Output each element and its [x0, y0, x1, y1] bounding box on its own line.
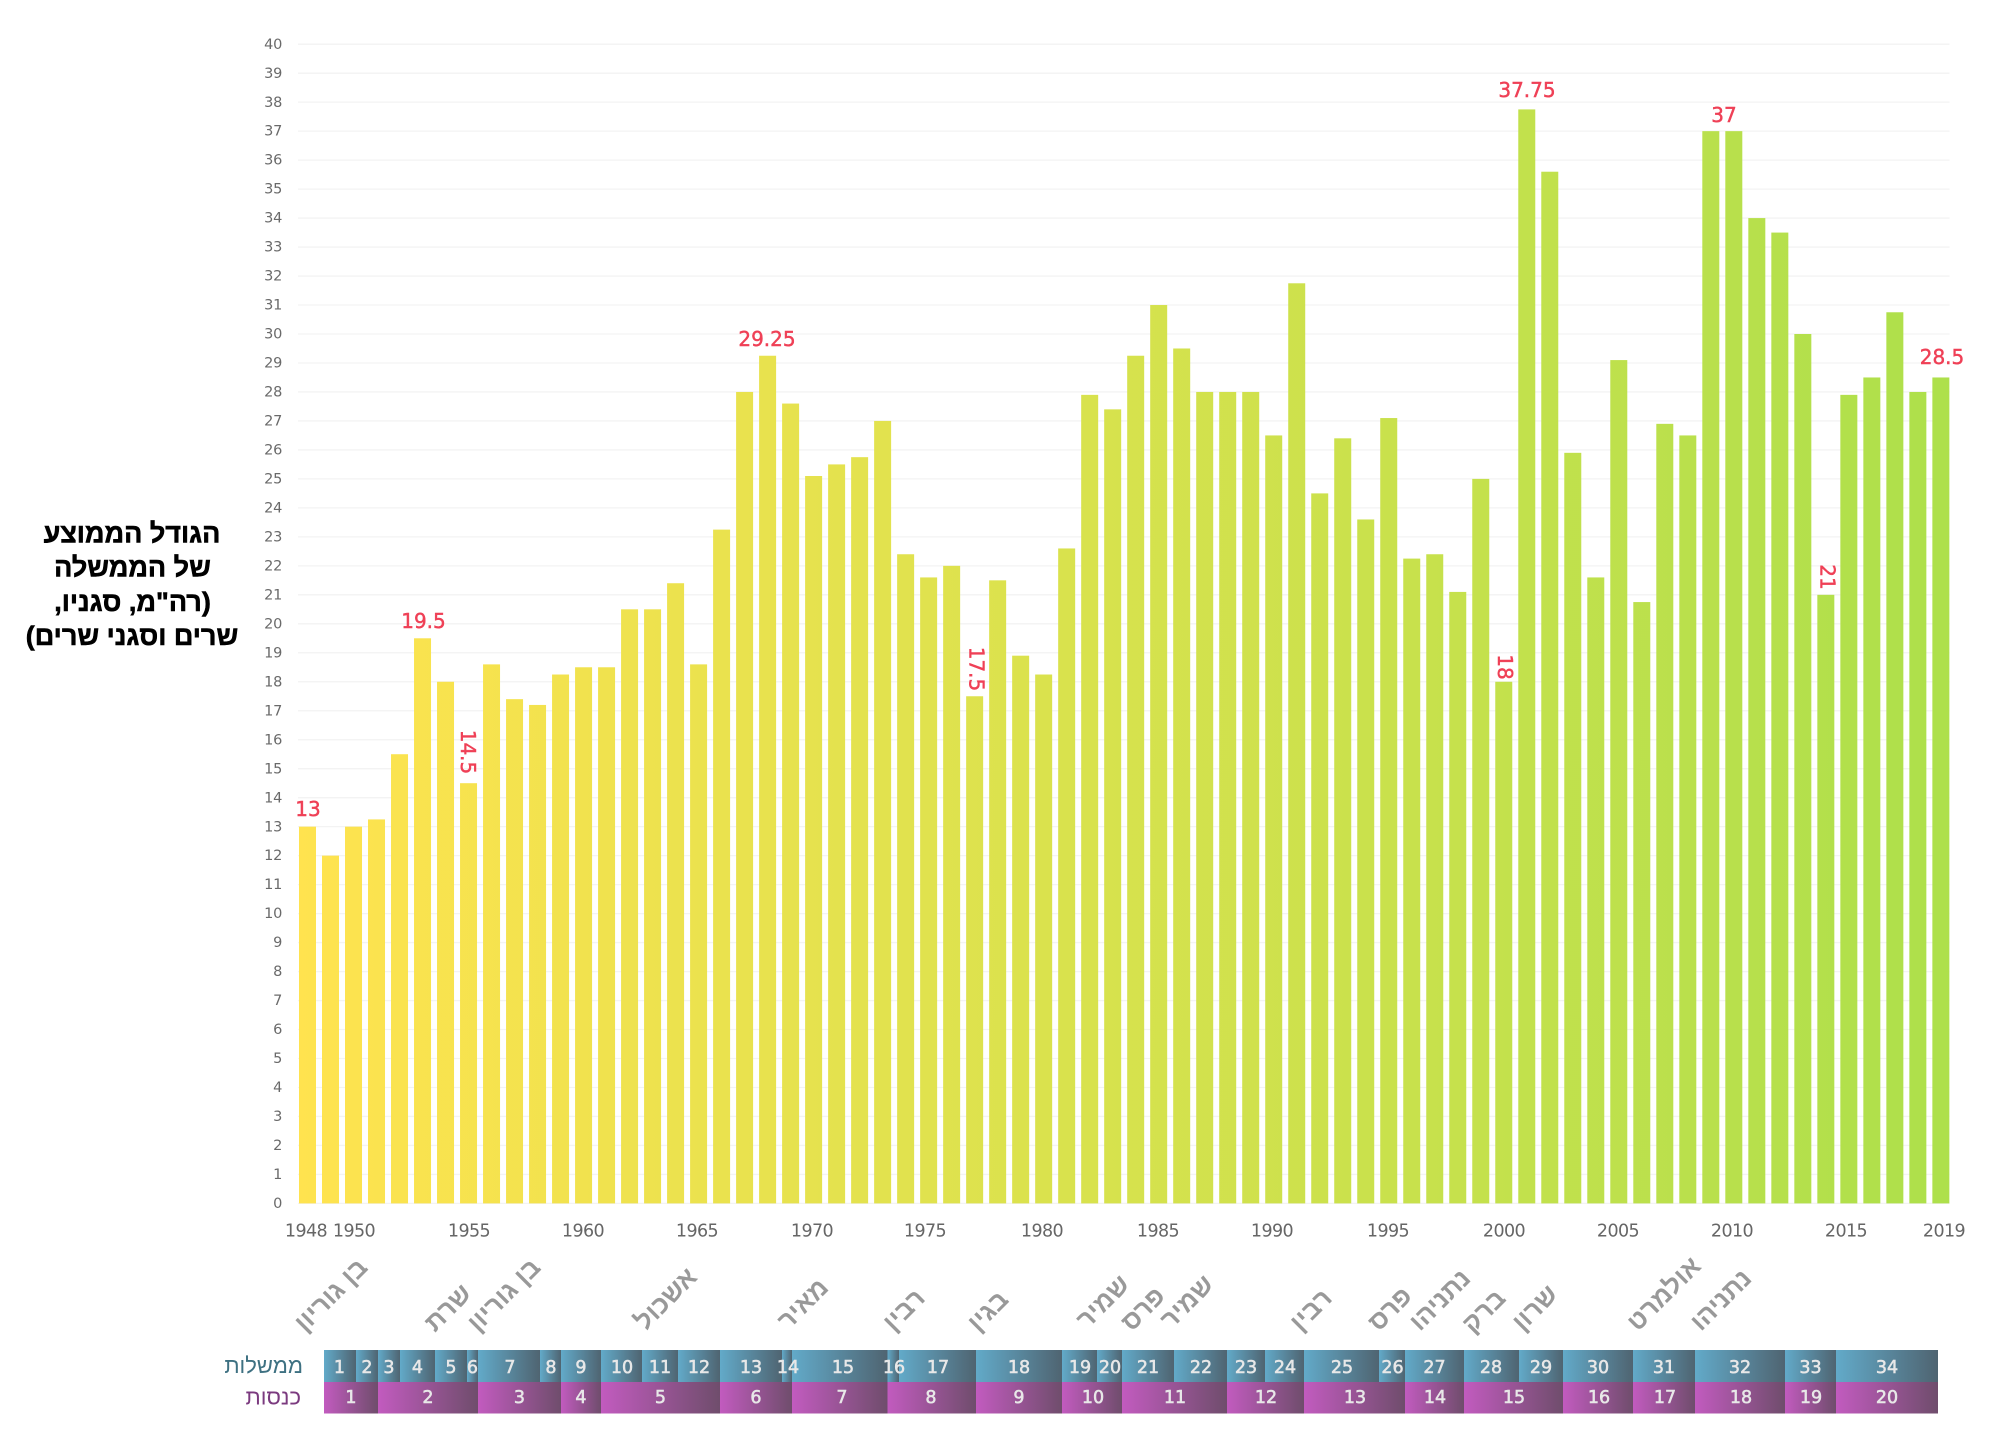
y axis labels: 39 — [264, 66, 282, 82]
prime minister names — [288, 1250, 1757, 1338]
value callouts: 28.5 — [1920, 345, 1964, 369]
governments row: 12 — [688, 1358, 710, 1378]
knessets row: 1 — [345, 1388, 357, 1408]
governments row: 18 — [1008, 1358, 1030, 1378]
governments row: 2 — [361, 1358, 373, 1378]
governments row: 22 — [1190, 1358, 1212, 1378]
governments row: 11 — [649, 1358, 671, 1378]
knessets row: 9 — [1013, 1388, 1025, 1408]
bar chart — [299, 109, 1949, 1203]
governments row: 26 — [1381, 1358, 1404, 1378]
title: של הממשלה — [54, 552, 211, 582]
governments row: 19 — [1069, 1358, 1091, 1378]
knessets row: 7 — [836, 1388, 848, 1408]
knessets row: 11 — [1164, 1388, 1186, 1408]
prime minister names: רבין — [1284, 1283, 1338, 1337]
value callouts — [295, 78, 1964, 821]
knessets row: 10 — [1082, 1388, 1104, 1408]
x axis years: 2019 — [1923, 1222, 1965, 1242]
governments row: 34 — [1876, 1358, 1898, 1378]
knessets row: 3 — [514, 1388, 525, 1408]
governments row: 33 — [1799, 1358, 1822, 1378]
prime minister names: פרס — [1362, 1281, 1418, 1337]
y axis labels: 3 — [273, 1109, 282, 1125]
y axis labels: 1 — [273, 1167, 282, 1183]
governments row: 21 — [1137, 1358, 1159, 1378]
governments row: 32 — [1729, 1358, 1751, 1378]
y axis labels: 27 — [264, 413, 282, 429]
knessets row: 17 — [1654, 1388, 1676, 1408]
prime minister names: רבין — [877, 1283, 931, 1337]
governments row: 6 — [467, 1358, 478, 1378]
x axis years: 1995 — [1367, 1222, 1409, 1242]
prime minister names: אולמרט — [1621, 1250, 1707, 1337]
y axis labels — [264, 37, 282, 1212]
knessets row: 6 — [750, 1388, 762, 1408]
y axis labels: 29 — [264, 356, 282, 372]
knessets row: 15 — [1503, 1388, 1525, 1408]
knessets row: 18 — [1730, 1388, 1752, 1408]
y axis labels: 14 — [264, 790, 282, 806]
y axis labels: 35 — [264, 182, 282, 198]
y axis labels: 4 — [273, 1080, 282, 1096]
y axis labels: 31 — [264, 298, 282, 314]
y axis labels: 24 — [264, 500, 282, 516]
y axis labels: 2 — [273, 1138, 282, 1154]
governments row: 23 — [1235, 1358, 1257, 1378]
y axis labels: 9 — [273, 935, 282, 951]
x axis years: 2000 — [1483, 1222, 1525, 1242]
x axis years: 1985 — [1137, 1222, 1179, 1242]
title: הגודל הממוצע — [44, 518, 220, 548]
y axis labels: 21 — [264, 587, 282, 603]
knessets row: 19 — [1800, 1388, 1822, 1408]
x axis years: 2005 — [1597, 1222, 1639, 1242]
prime minister names: נתניהו — [1684, 1263, 1757, 1336]
y axis labels: 22 — [264, 558, 282, 574]
y axis labels: 25 — [264, 471, 282, 487]
y axis labels: 37 — [264, 124, 282, 140]
y axis labels: 18 — [264, 674, 282, 690]
y axis labels: 5 — [273, 1051, 282, 1067]
y axis labels: 20 — [264, 616, 282, 632]
governments row: 29 — [1530, 1358, 1552, 1378]
governments row: 8 — [545, 1358, 557, 1378]
knessets row: 2 — [422, 1388, 434, 1408]
value callouts: 13 — [295, 797, 321, 821]
value callouts: 14.5 — [456, 730, 480, 774]
prime minister names: ברק — [1456, 1283, 1511, 1338]
governments row: 25 — [1331, 1358, 1353, 1378]
knessets row: 8 — [925, 1388, 937, 1408]
governments row: 27 — [1423, 1358, 1446, 1378]
title: (רה"מ, סגניו, — [54, 587, 211, 617]
governments row: 5 — [445, 1358, 457, 1378]
governments row — [324, 1350, 1938, 1382]
governments row: 17 — [927, 1358, 949, 1378]
x axis years: 1960 — [562, 1222, 604, 1242]
y axis labels: 40 — [264, 37, 282, 53]
knessets row: 5 — [655, 1388, 666, 1408]
y axis labels: 34 — [264, 211, 282, 227]
prime minister names: שמיר — [1154, 1269, 1219, 1334]
y axis labels: 36 — [264, 153, 282, 169]
governments row: 31 — [1653, 1358, 1675, 1378]
x axis years — [285, 1222, 1965, 1242]
governments row: 1 — [334, 1358, 345, 1378]
knessets row: 4 — [575, 1388, 587, 1408]
y axis labels: 33 — [264, 240, 282, 256]
x axis years: 1948 — [285, 1222, 327, 1242]
y axis labels: 10 — [264, 906, 282, 922]
row label: governments: ממשלות — [224, 1353, 303, 1378]
governments row: 24 — [1274, 1358, 1296, 1378]
prime minister names: שמיר — [1070, 1269, 1135, 1334]
x axis years: 1975 — [904, 1222, 946, 1242]
value callouts: 29.25 — [738, 327, 796, 351]
y axis labels: 7 — [273, 993, 282, 1009]
governments row: 4 — [412, 1358, 423, 1378]
x axis years: 1970 — [791, 1222, 833, 1242]
y axis labels: 38 — [264, 95, 282, 111]
x axis years: 2015 — [1825, 1222, 1867, 1242]
value callouts: 17.5 — [964, 647, 988, 691]
governments row: 3 — [383, 1358, 395, 1378]
x axis years: 1950 — [333, 1222, 375, 1242]
row label: knessets: כנסות — [246, 1384, 301, 1410]
y axis labels: 28 — [264, 385, 282, 401]
x axis years: 1965 — [676, 1222, 718, 1242]
y axis labels: 23 — [264, 530, 282, 546]
governments row: 20 — [1099, 1358, 1121, 1378]
governments row: 14 — [777, 1358, 799, 1378]
value callouts: 37 — [1711, 103, 1737, 127]
prime minister names: פרס — [1115, 1281, 1171, 1337]
value callouts: 21 — [1816, 564, 1840, 590]
y axis labels: 15 — [264, 761, 282, 777]
knessets row: 13 — [1344, 1388, 1366, 1408]
governments row: 9 — [575, 1358, 587, 1378]
knessets row: 14 — [1424, 1388, 1446, 1408]
prime minister names: בן גוריון — [461, 1252, 546, 1337]
y axis labels: 12 — [264, 848, 282, 864]
governments row: 13 — [740, 1358, 762, 1378]
y axis labels: 11 — [264, 877, 282, 893]
prime minister names: שרון — [1506, 1279, 1563, 1336]
knessets row: 12 — [1255, 1388, 1277, 1408]
x axis years: 1990 — [1251, 1222, 1293, 1242]
prime minister names: נתניהו — [1403, 1263, 1476, 1336]
knessets row: 16 — [1588, 1388, 1610, 1408]
prime minister names: בגין — [961, 1284, 1014, 1337]
governments row: 15 — [832, 1358, 854, 1378]
governments row: 28 — [1480, 1358, 1502, 1378]
title — [26, 518, 238, 651]
prime minister names: אשכול — [628, 1261, 703, 1336]
prime minister names: שרת — [418, 1278, 477, 1337]
y axis labels: 19 — [264, 645, 282, 661]
knessets row — [324, 1382, 1938, 1414]
y axis labels: 16 — [264, 732, 282, 748]
value callouts: 37.75 — [1498, 78, 1556, 102]
y axis labels: 32 — [264, 269, 282, 285]
governments row: 7 — [504, 1358, 516, 1378]
value callouts: 19.5 — [401, 609, 446, 633]
x axis years: 1980 — [1021, 1222, 1063, 1242]
y axis labels: 8 — [273, 964, 282, 980]
governments row: 10 — [611, 1358, 633, 1378]
y axis labels: 30 — [264, 327, 282, 343]
governments row: 30 — [1587, 1358, 1609, 1378]
y axis labels: 17 — [264, 703, 282, 719]
y axis labels: 0 — [273, 1196, 282, 1212]
y axis labels: 13 — [264, 819, 282, 835]
prime minister names: מאיר — [771, 1272, 834, 1335]
title: שרים וסגני שרים) — [26, 621, 238, 651]
knessets row: 20 — [1876, 1388, 1898, 1408]
governments row: 16 — [883, 1358, 905, 1378]
grid lines — [298, 44, 1950, 1203]
y axis labels: 26 — [264, 442, 282, 458]
x axis years: 1955 — [448, 1222, 490, 1242]
prime minister names: בן גוריון — [288, 1252, 373, 1337]
x axis years: 2010 — [1711, 1222, 1753, 1242]
y axis labels: 6 — [273, 1022, 282, 1038]
value callouts: 18 — [1493, 654, 1517, 680]
